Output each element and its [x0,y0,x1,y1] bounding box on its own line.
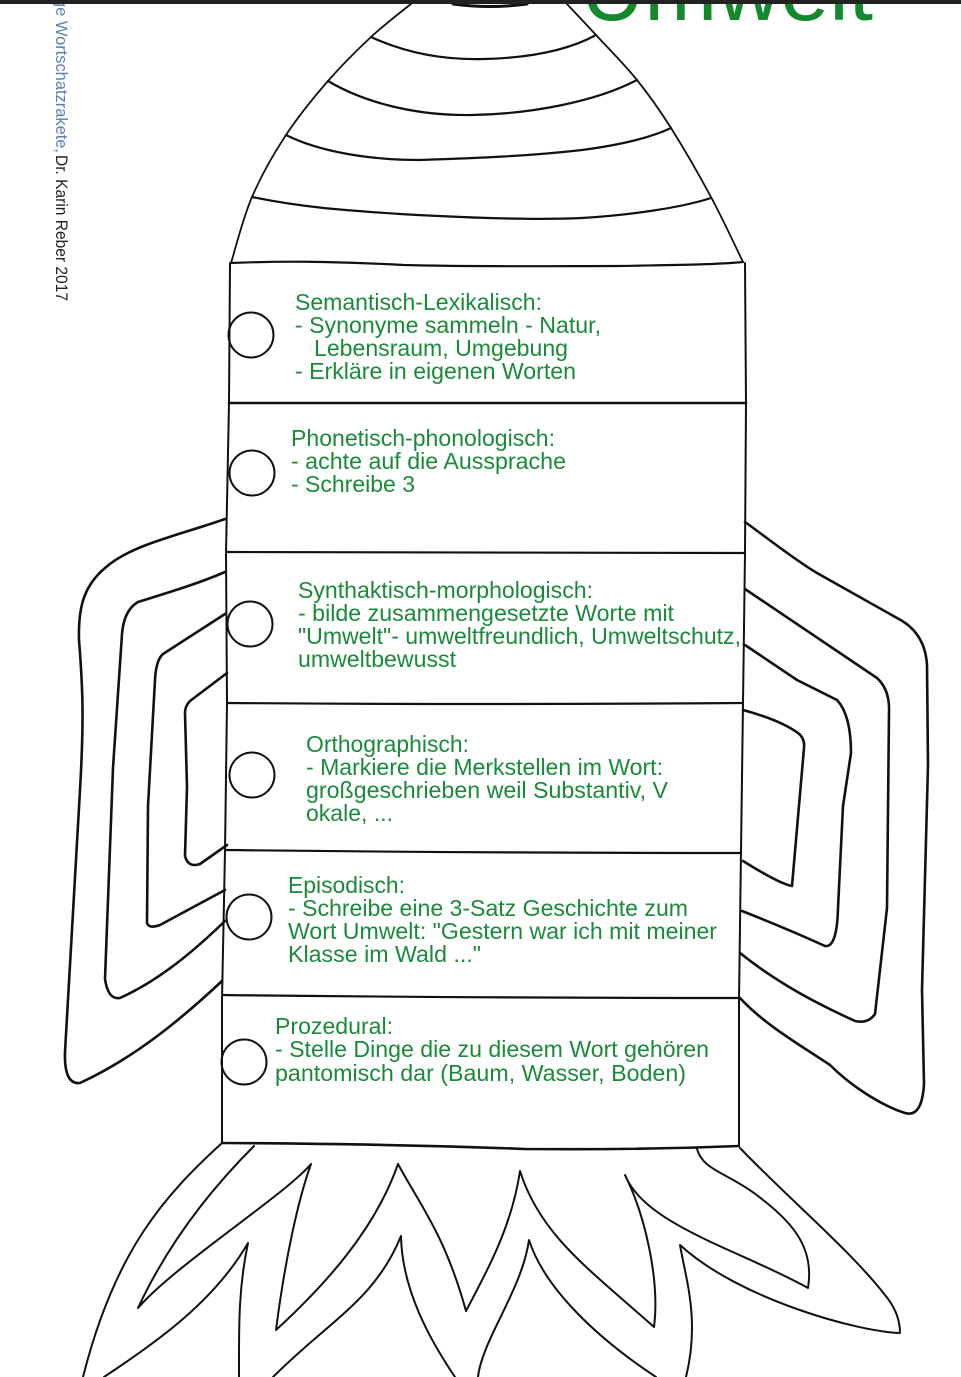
section: Semantisch-Lexikalisch [295,289,601,384]
section: Synthaktisch-morphologisch: umweltbewusst [298,646,457,672]
rocket nose cone [231,4,743,266]
section: Orthographisch: großgeschrieben weil Substantiv, V [306,777,669,803]
section: Orthographisch [306,731,669,826]
section: Phonetisch-phonologisch: - achte auf die Aussprache [291,448,566,474]
side credit text: Dr. Karin Reber 2017 [52,155,70,301]
section: Semantisch-Lexikalisch: Semantisch-Lexikalisch: [295,289,542,315]
section: Phonetisch-phonologisch: Phonetisch-phonologisch: [291,425,555,451]
nose stripes [231,35,743,266]
section: Episodisch: Klasse im Wald ..." [288,941,481,967]
section: Episodisch: Wort Umwelt: "Gestern war ich mit meiner [288,918,717,944]
section: Episodisch: - Schreibe eine 3-Satz Geschichte zum [288,895,688,921]
section: Phonetisch-phonologisch [291,425,566,497]
rocket top arc [453,4,527,6]
rocket body with six sections [222,263,746,1149]
rocket flames [83,1143,900,1377]
section: Semantisch-Lexikalisch: - Erkläre in eigenen Worten [295,358,576,384]
section: Synthaktisch-morphologisch [298,577,741,672]
section: Synthaktisch-morphologisch: - bilde zusammengesetzte Worte mit [298,600,675,626]
section: Prozedural: - Stelle Dinge die zu diesem Wort gehören [275,1036,709,1062]
section: Semantisch-Lexikalisch: - Synonyme sammeln - Natur, [295,312,601,338]
section: Prozedural [275,1013,709,1086]
right fins [740,522,928,1114]
left fins [65,519,227,1083]
section: Prozedural: pantomisch dar (Baum, Wasser, Boden) [275,1060,686,1086]
section: Synthaktisch-morphologisch: "Umwelt"- umweltfreundlich, Umweltschutz, [298,623,741,649]
section: Orthographisch: Orthographisch: [306,731,469,757]
section: Orthographisch: - Markiere die Merkstellen im Wort: [306,754,663,780]
section: Phonetisch-phonologisch: - Schreibe 3 [291,471,415,497]
section: Prozedural: Prozedural: [275,1013,393,1039]
section: Orthographisch: okale, ... [306,800,393,826]
section: Synthaktisch-morphologisch: Synthaktisch-morphologisch: [298,577,593,603]
checkbox circles [222,312,274,1084]
top edge bar [0,0,961,4]
side credit text: ge Wortschatzrakete, [52,0,70,153]
section: Episodisch: Episodisch: [288,872,405,898]
section: Episodisch [288,872,717,967]
section: Semantisch-Lexikalisch: Lebensraum, Umgebung [314,335,568,361]
side credit text [52,0,70,301]
